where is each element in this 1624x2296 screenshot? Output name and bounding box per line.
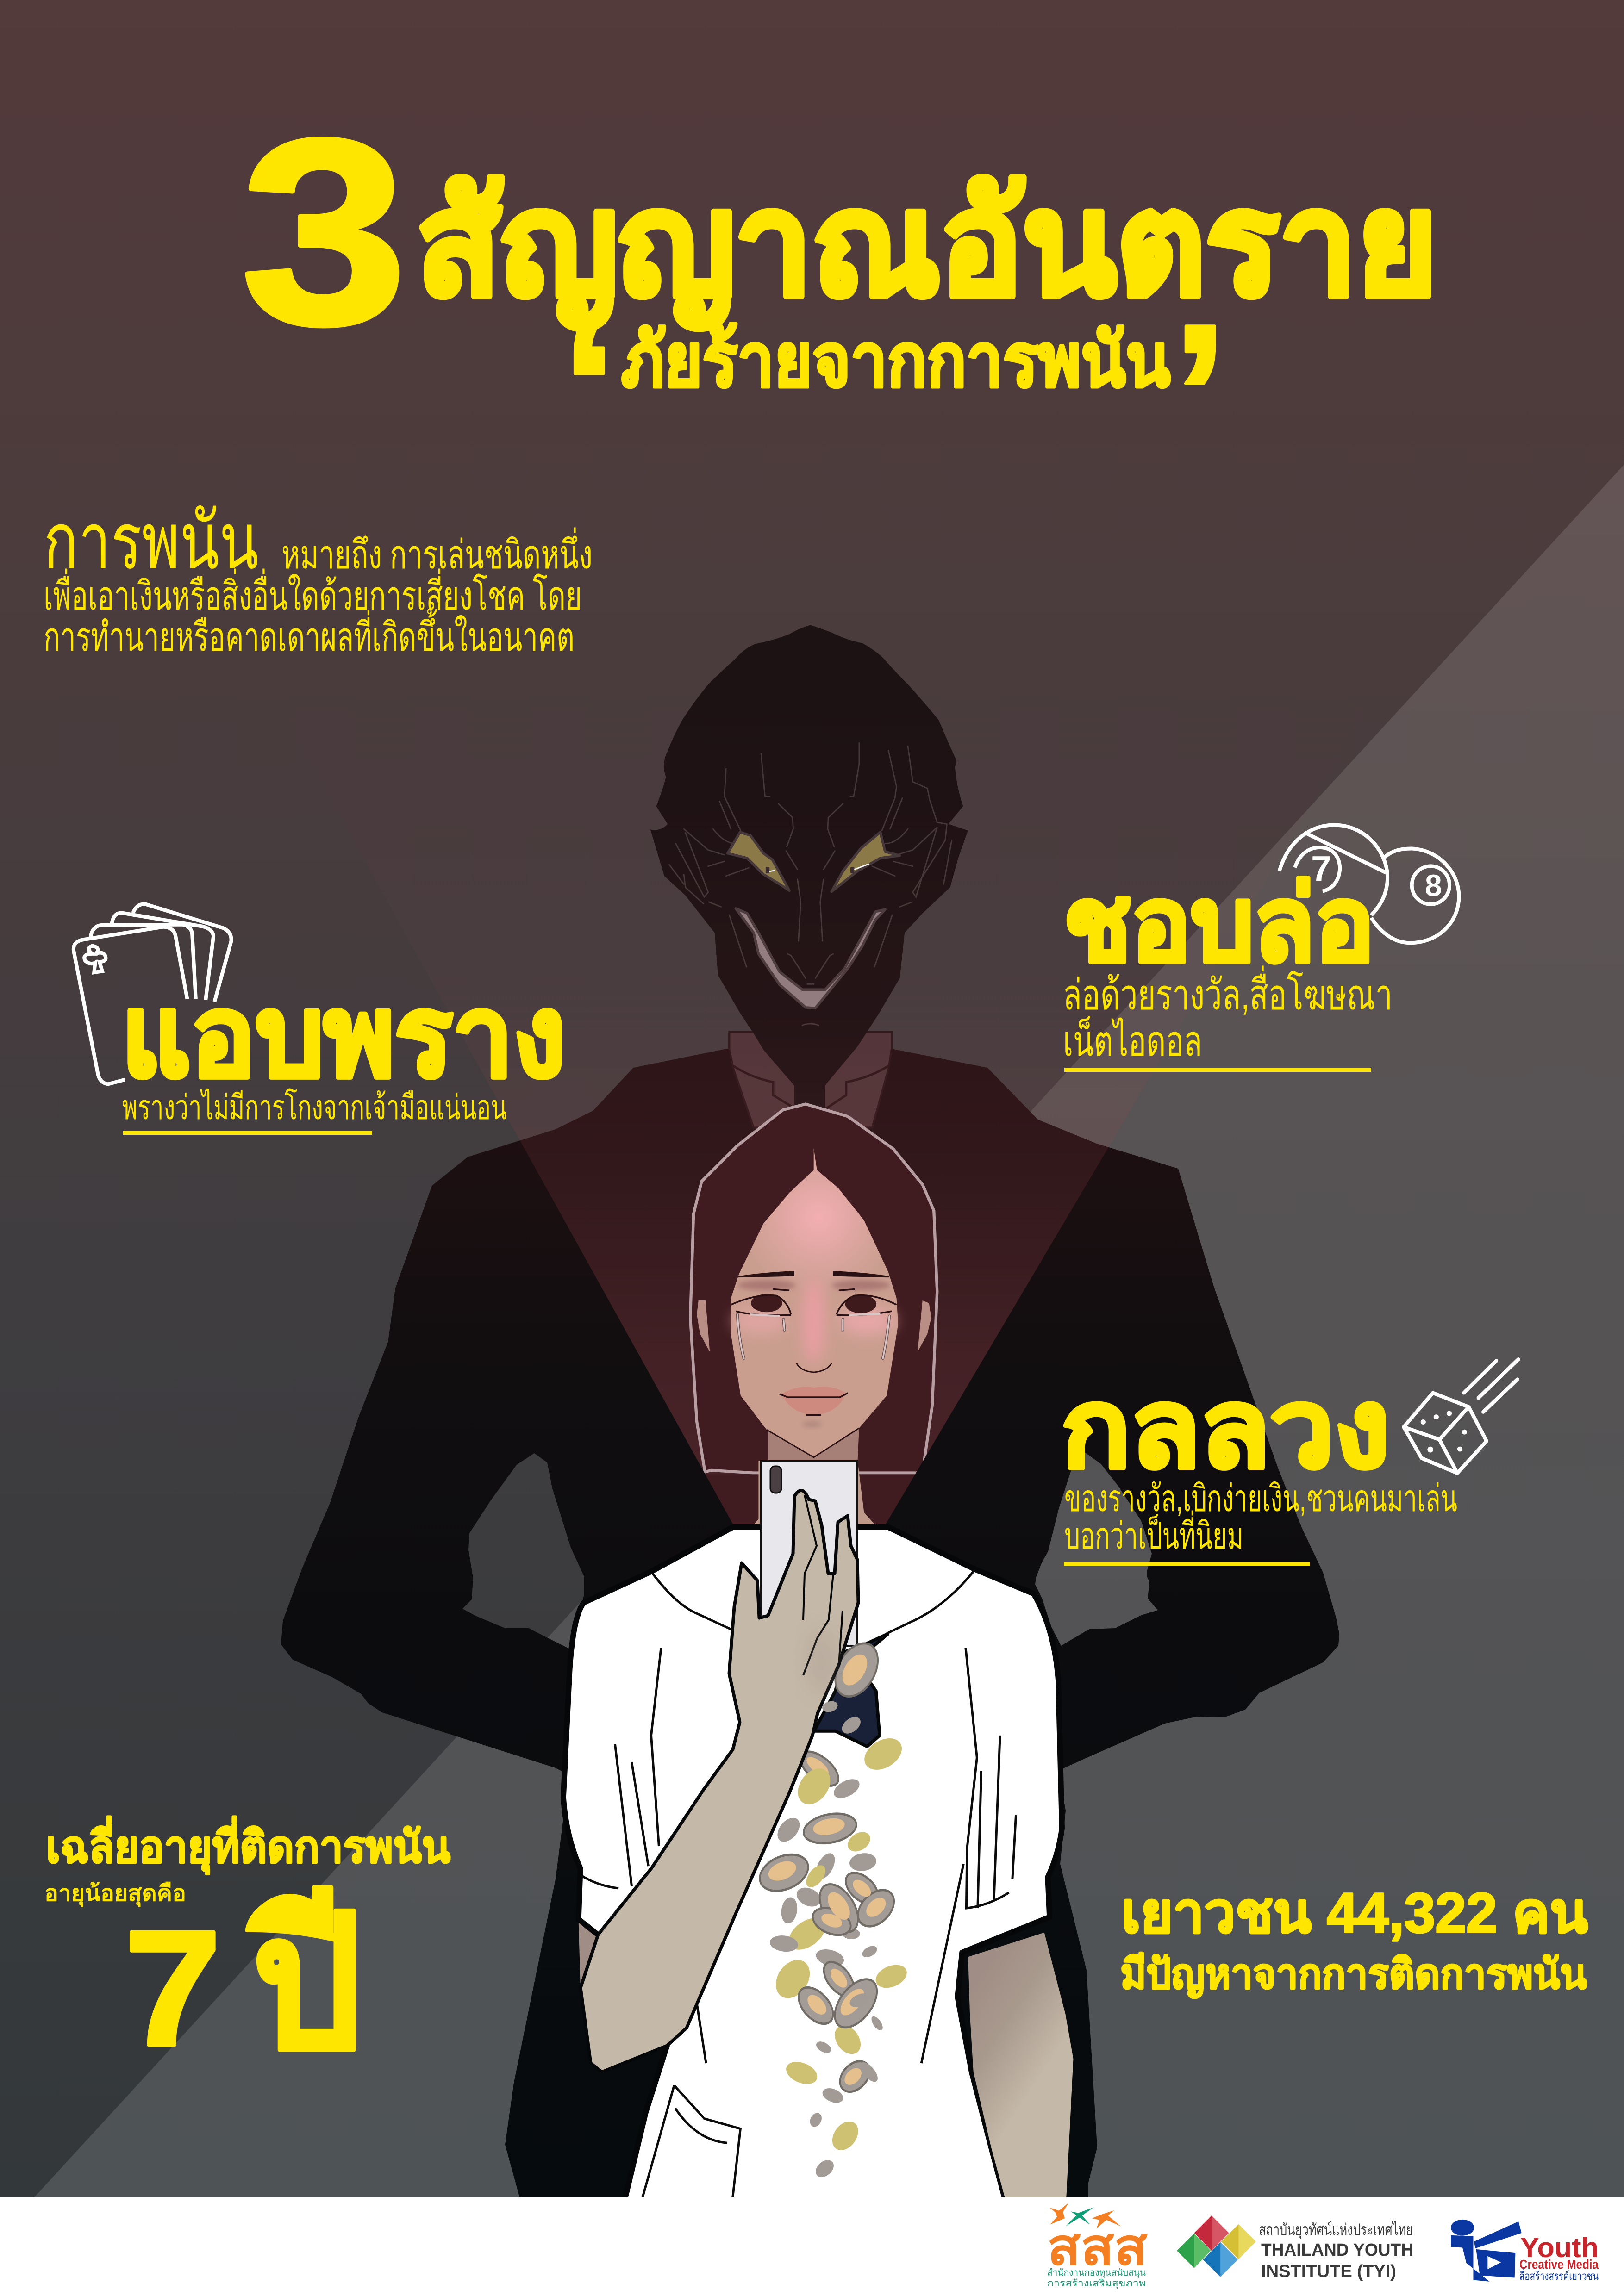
three people icon xyxy=(1049,2203,1121,2228)
logo: Thailand Youth Institute: THAILAND YOUTH xyxy=(1261,2240,1413,2260)
block: แอบพราง: พรางว่าไม่มีการโกงจากเจ้ามือแน่นอน xyxy=(122,1088,507,1126)
finger lines xyxy=(803,1495,843,1675)
block: แอบพราง: แอบพราง xyxy=(121,973,566,1100)
neck xyxy=(768,1426,859,1462)
face xyxy=(731,1148,898,1457)
brows xyxy=(738,1271,889,1277)
definition text xyxy=(44,498,593,660)
right forearm xyxy=(968,1933,1073,2199)
hand shading xyxy=(808,1629,836,1694)
icon: billiard balls: 8 xyxy=(1425,868,1442,902)
eyes xyxy=(751,1294,782,1312)
tears xyxy=(737,1314,889,1358)
title main: สัญญาณอันตราย xyxy=(417,164,1437,330)
block: ชอบล่อ: เน็ตไอดอล xyxy=(1063,1016,1202,1065)
block: ชอบล่อ: ล่อด้วยรางวัล,สื่อโฆษณา xyxy=(1063,965,1393,1019)
devil eyes xyxy=(728,832,900,891)
ball numbers: 7 xyxy=(1311,848,1331,889)
left sleeve and torso xyxy=(563,1527,1062,2201)
logo: Youth Creative Media: Creative Media xyxy=(1519,2257,1599,2271)
collar xyxy=(729,1032,892,1127)
footer white band xyxy=(0,2197,1624,2296)
logo: Youth Creative Media: Youth xyxy=(1520,2232,1599,2263)
grin xyxy=(736,908,885,1008)
block: กลลวง: กลลวง xyxy=(1062,1368,1390,1489)
upper left arm skin xyxy=(579,1922,600,1984)
falling coins xyxy=(756,1633,909,2180)
bow tie xyxy=(814,1634,888,1747)
subtitle xyxy=(561,273,1228,510)
lips xyxy=(781,1387,846,1415)
stat: youth count xyxy=(1120,1881,1588,1999)
block: ชอบล่อ xyxy=(1063,866,1393,1072)
coloured diamonds xyxy=(1177,2215,1256,2277)
logo: Thailand Youth Institute: สถาบันยุวทัศน์แห่งประเทศไทย xyxy=(1259,2221,1413,2239)
background: lighter diagonal wedge xyxy=(33,465,1624,2198)
stat: average age: อายุน้อยสุดคือ xyxy=(44,1881,186,1907)
blush and nose xyxy=(732,1309,788,1333)
subtitle: ‘ xyxy=(561,273,618,500)
definition text: การพนัน xyxy=(44,498,259,585)
title xyxy=(241,84,1437,510)
icon: dice xyxy=(1404,1359,1518,1473)
school shirt xyxy=(563,1527,1062,2201)
block: ชอบล่อ: ชอบล่อ xyxy=(1064,866,1374,983)
logo: Thailand Youth Institute: INSTITUTE (TYI) xyxy=(1261,2262,1396,2281)
shirt folds xyxy=(581,1569,1016,2198)
definition text: การทำนายหรือคาดเดาผลที่เกิดขึ้นในอนาคต xyxy=(44,609,575,660)
ball outlines xyxy=(1279,825,1459,943)
head silhouette xyxy=(650,625,968,1108)
logo: ThaiHealth: การสร้างเสริมสุขภาพ xyxy=(1047,2278,1146,2289)
logo: Youth Creative Media: สื่อสร้างสรรค์เยาวชน xyxy=(1519,2268,1599,2283)
icon: billiard balls xyxy=(1279,825,1459,943)
icon: playing cards xyxy=(74,904,231,1084)
block: กลลวง: บอกว่าเป็นที่นิยม xyxy=(1064,1511,1243,1556)
illustration: shadow man xyxy=(281,625,1339,2198)
man head, collar and face xyxy=(650,625,968,1127)
clapper mascot icon xyxy=(1451,2220,1522,2282)
stat: youth count: มีปัญหาจากการติดการพนัน xyxy=(1120,1951,1587,1999)
logo: ThaiHealth: สสส xyxy=(1047,2219,1148,2276)
logo: Thailand Youth Institute xyxy=(1177,2215,1413,2281)
holding hand and forearm xyxy=(581,1491,858,2072)
title number 3: 3 xyxy=(241,84,407,379)
stat: average age xyxy=(44,1816,450,2086)
logo: ThaiHealth xyxy=(1047,2203,1148,2289)
nose xyxy=(797,1363,831,1372)
illustration: crying girl with phone xyxy=(563,1104,1073,2201)
ears xyxy=(697,1300,931,1352)
subtitle: ’ xyxy=(1172,282,1228,510)
face lines xyxy=(669,743,952,1025)
subtitle: ภัยร้ายจากการพนัน xyxy=(621,319,1170,402)
stat: youth count: เยาวชน 44,322 คน xyxy=(1121,1881,1588,1944)
stat: average age: เฉลี่ยอายุที่ติดการพนัน xyxy=(46,1816,450,1875)
chin line xyxy=(767,1428,859,1457)
phone xyxy=(761,1461,857,1646)
definition text: หมายถึง การเล่นชนิดหนึ่ง xyxy=(281,527,593,577)
girl head xyxy=(697,1148,931,1574)
girl hair, clipped to the light cone xyxy=(690,1104,937,1530)
definition text: เพื่อเอาเงินหรือสิ่งอื่นใดด้วยการเสี่ยงโชค โดย xyxy=(44,568,582,618)
stat: average age: 7 xyxy=(124,1897,221,2080)
phone light cone xyxy=(272,694,1376,1657)
logo: Youth Creative Media xyxy=(1451,2220,1599,2283)
stat: average age: ปี xyxy=(245,1879,362,2086)
logo: ThaiHealth: สำนักงานกองทุนสนับสนุน xyxy=(1047,2268,1146,2278)
man suit silhouette xyxy=(281,1048,1339,2198)
block: กลลวง xyxy=(1062,1368,1457,1566)
